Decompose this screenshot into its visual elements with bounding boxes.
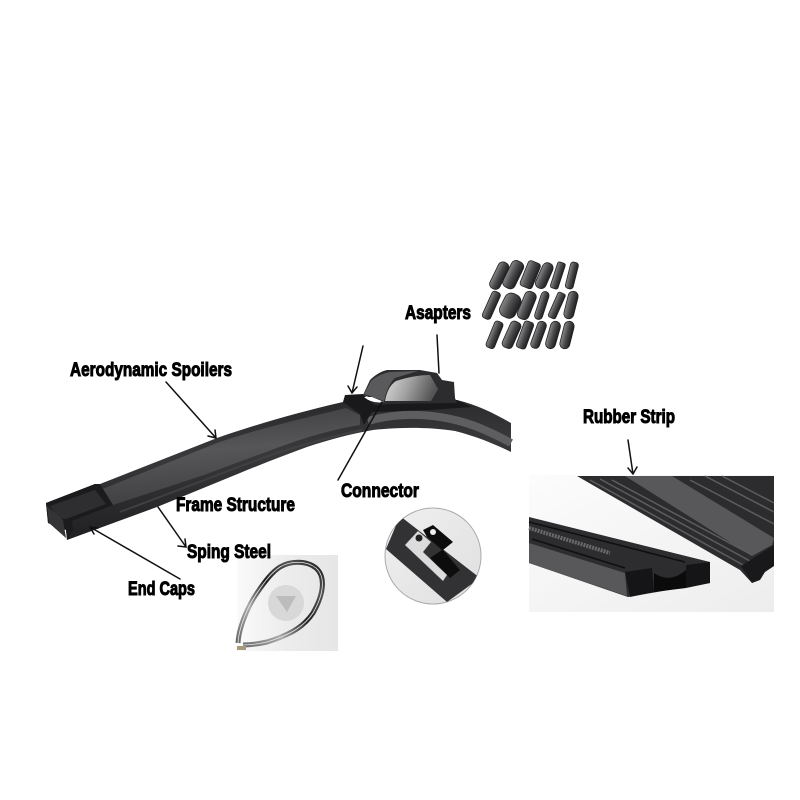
lower rim highlight <box>120 430 362 512</box>
label: spring steel: Sping Steel <box>187 542 271 563</box>
blade rail <box>386 516 480 602</box>
front strip rib lines <box>529 522 685 568</box>
rear strip end profile <box>741 545 774 583</box>
blade right arm highlight <box>368 415 511 443</box>
wiper blade <box>46 370 511 540</box>
label: adapters: Asapters <box>405 303 471 324</box>
front strip right profile <box>686 562 710 588</box>
spring steel photo panel <box>237 555 338 651</box>
blade body <box>46 396 511 540</box>
connector cover left shading <box>364 371 418 401</box>
front rubber strip <box>529 517 710 597</box>
disc triangle <box>276 596 296 612</box>
adapters group <box>481 259 579 350</box>
end cap <box>46 484 113 540</box>
connector detail circle <box>385 508 481 604</box>
plate rivet <box>416 534 422 542</box>
rear strip lighter centre band <box>625 476 774 556</box>
arrow: rubber strip <box>628 440 637 474</box>
steel loop <box>238 562 322 645</box>
aerodynamic spoiler channel <box>100 408 360 505</box>
connector base <box>343 394 472 425</box>
label: rubber strip: Rubber Strip <box>583 407 675 428</box>
front strip web <box>654 570 686 592</box>
end cap front wall <box>47 506 66 538</box>
center disc <box>268 585 304 621</box>
black clip <box>423 525 460 578</box>
arrow: frame structure <box>348 346 363 393</box>
label: frame structure: Frame Structure <box>176 495 295 516</box>
front strip textured band <box>529 528 610 553</box>
end cap inner tray <box>50 490 106 519</box>
panel background <box>237 555 338 651</box>
clip upper hole <box>430 529 436 535</box>
label: end caps: End Caps <box>128 579 195 600</box>
arrow: spring steel <box>158 507 186 547</box>
rubber strip photo panel <box>529 475 774 612</box>
connector cover <box>363 370 457 403</box>
arrow: aerodynamic spoilers <box>166 382 216 438</box>
front strip side face <box>529 543 627 596</box>
silver clip plate <box>405 531 447 581</box>
rear strip ribs <box>590 476 774 566</box>
steel loop inner line <box>238 562 322 645</box>
panel background <box>529 475 774 612</box>
label: aerodynamic spoilers: Aerodynamic Spoilers <box>70 360 232 381</box>
connector white gap <box>364 397 384 402</box>
rear rubber strip <box>577 476 774 583</box>
loop clasp <box>237 646 246 650</box>
front strip left profile <box>625 568 654 597</box>
line: connector <box>338 402 382 480</box>
arrow: end caps <box>90 527 180 579</box>
label: connector: Connector <box>341 481 419 502</box>
connector silver face <box>385 375 438 401</box>
circle base <box>385 508 481 604</box>
line: adapters <box>437 335 439 373</box>
